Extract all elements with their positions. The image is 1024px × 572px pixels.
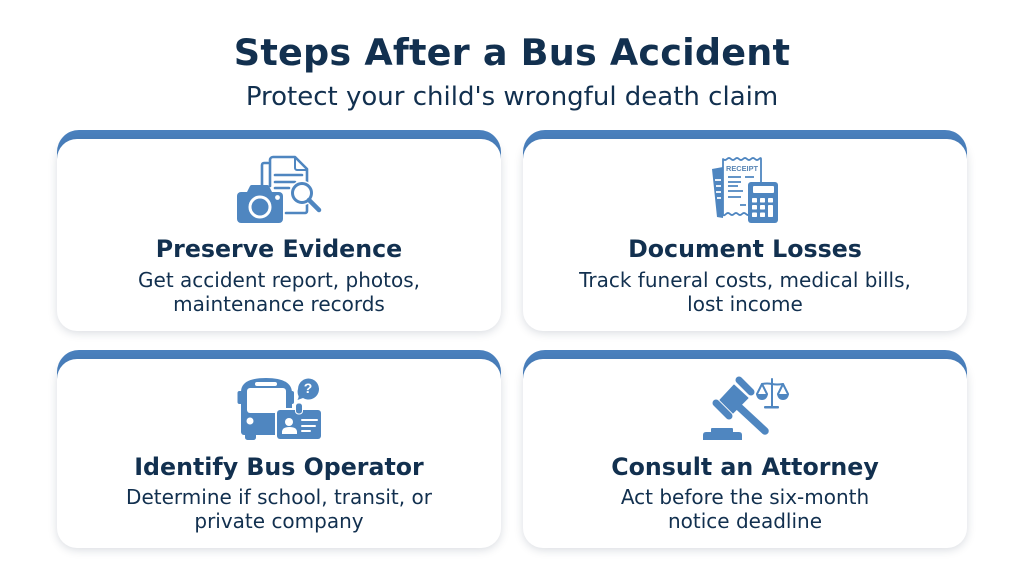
body text: notice deadline <box>668 509 822 533</box>
panel: identify bus operator <box>54 350 504 554</box>
heading: Consult an Attorney <box>611 453 879 481</box>
heading: Preserve Evidence <box>156 235 402 263</box>
icon: bus, ID badge and question bubble: ? <box>304 380 312 396</box>
heading: Document Losses <box>628 235 862 263</box>
body text: maintenance records <box>173 292 385 316</box>
icon: receipt and calculator <box>712 157 778 223</box>
body text: private company <box>194 509 364 533</box>
body text <box>138 268 420 316</box>
body text: lost income <box>687 292 803 316</box>
body text: Get accident report, photos, <box>138 268 420 292</box>
body text <box>126 485 432 533</box>
icon: bus, ID badge and question bubble <box>238 378 321 440</box>
panel: document losses <box>520 130 970 336</box>
panel: preserve evidence <box>54 130 504 336</box>
heading: Identify Bus Operator <box>134 453 424 481</box>
panel: consult an attorney <box>520 350 970 554</box>
icon: gavel and scales <box>703 376 789 440</box>
icon: camera, document and magnifier <box>237 156 322 223</box>
subtitle: Protect your child's wrongful death claim <box>246 82 778 112</box>
body text <box>621 485 869 533</box>
body text: Track funeral costs, medical bills, <box>579 268 911 292</box>
icon: receipt and calculator: RECEIPT <box>726 164 759 173</box>
body text: Determine if school, transit, or <box>126 485 432 509</box>
title: Steps After a Bus Accident <box>234 31 790 74</box>
body text <box>579 268 911 316</box>
body text: Act before the six-month <box>621 485 869 509</box>
